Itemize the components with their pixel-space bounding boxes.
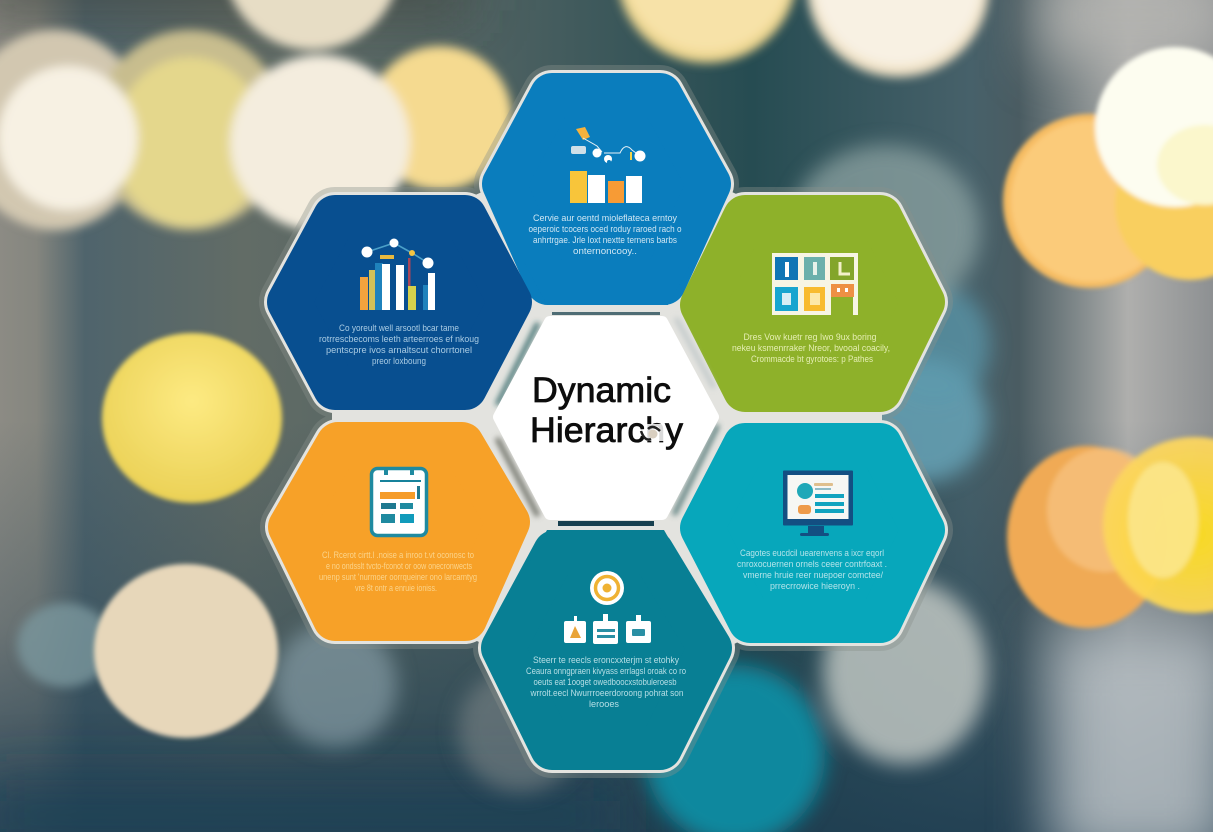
- text: green panel description: Dres Vow kuetr reg Iwo 9ux boring: [744, 332, 876, 343]
- inner edge shadows around the center hexagon: [497, 312, 718, 526]
- icon: person artifact over title: [641, 424, 664, 441]
- text: teal panel description: vmerne hruie reer nuepoer comctee/: [743, 570, 883, 581]
- panel: dark teal hexagon: [503, 530, 710, 748]
- light glass frames of hexagons: [289, 95, 923, 748]
- text: teal panel description: Cagotes eucdcil uearenvens a ixcr eqorl: [740, 548, 884, 559]
- text: top panel description: onternoncooy..: [573, 246, 637, 257]
- title: Hierarchy: [530, 411, 684, 450]
- text: orange panel description: [319, 550, 477, 594]
- text: left upper panel description: preor loxboung: [372, 356, 426, 367]
- text: green panel description: nekeu ksmenrraker Nreor, bvooal coacily,: [732, 343, 890, 354]
- light gaps between neighbouring hexagons: [332, 192, 882, 644]
- text: orange panel description: unenp sunt 'nurmoer oorrqueiner ono larcarntyg: [319, 572, 477, 583]
- text: dark teal panel description: wrrolt.eecl Nwurrroeerdoroong pohrat son: [530, 688, 684, 699]
- text: left upper panel description: pentscpre ivos arnaltscut chorrtonel: [326, 345, 472, 356]
- text: dark teal panel description: Steerr te reecls eroncxxterjm st etohky: [533, 655, 679, 666]
- icon: dashboard grid: [772, 253, 858, 315]
- panel: dark blue hexagon: [289, 217, 510, 388]
- icon: calendar form: [372, 467, 426, 536]
- text: left upper panel description: Co yoreult well arsootl bcar tame: [339, 323, 459, 334]
- text: top panel description: oeperoic tcocers oced roduy raroed rach o: [528, 224, 682, 235]
- title: [530, 371, 684, 450]
- icon: tools and bar chart: [570, 127, 646, 203]
- text: teal panel description: prrecrrowice hieeroyn .: [770, 581, 860, 592]
- text: green panel description: Crommacde bt gyrotoes: p Pathes: [751, 354, 873, 365]
- text: top panel description: Cervie aur oentd mioleflateca erntoy: [533, 213, 677, 224]
- text: teal panel description: [737, 548, 887, 592]
- text: left upper panel description: [319, 323, 479, 367]
- panel: teal hexagon: [702, 445, 923, 621]
- text: teal panel description: cnroxocuernen ornels ceeer contrfoaxt .: [737, 559, 887, 570]
- panel: central white hexagon: [499, 322, 713, 514]
- text: dark teal panel description: [526, 655, 686, 710]
- text: dark teal panel description: Ceaura onngpraen kivyass errlagsl oroak co ro: [526, 666, 686, 677]
- text: dark teal panel description: oeuts eat 1ooget owedboocxstobuleroesb: [534, 677, 676, 688]
- text: top panel description: anhrtrgae. Jrle loxt nextte ternens barbs: [533, 235, 677, 246]
- text: dark teal panel description: lerooes: [589, 699, 619, 710]
- icon: network bar chart: [360, 238, 435, 310]
- text: orange panel description: vre 8t ontr a enruie ioniss.: [355, 583, 437, 594]
- text: green panel description: [732, 332, 890, 365]
- text: orange panel description: Cl. Rcerot cirtt.l .noise a inroo t.vt oconosc to: [322, 550, 474, 561]
- panel: top blue hexagon: [504, 95, 709, 305]
- panel: green hexagon: [702, 217, 923, 390]
- icon: target and badges: [564, 571, 651, 644]
- text: orange panel description: e no ondsslt tvcto-fconot or oow onecronwects: [326, 561, 472, 572]
- panel: orange hexagon: [290, 444, 508, 619]
- icon: desktop monitor: [783, 470, 853, 536]
- title: Dynamic: [532, 371, 671, 410]
- text: top panel description: [528, 213, 682, 257]
- text: left upper panel description: rotrrescbecoms leeth arteerroes ef nkoug: [319, 334, 479, 345]
- translucent outer rim of hexagon cluster: [289, 95, 923, 748]
